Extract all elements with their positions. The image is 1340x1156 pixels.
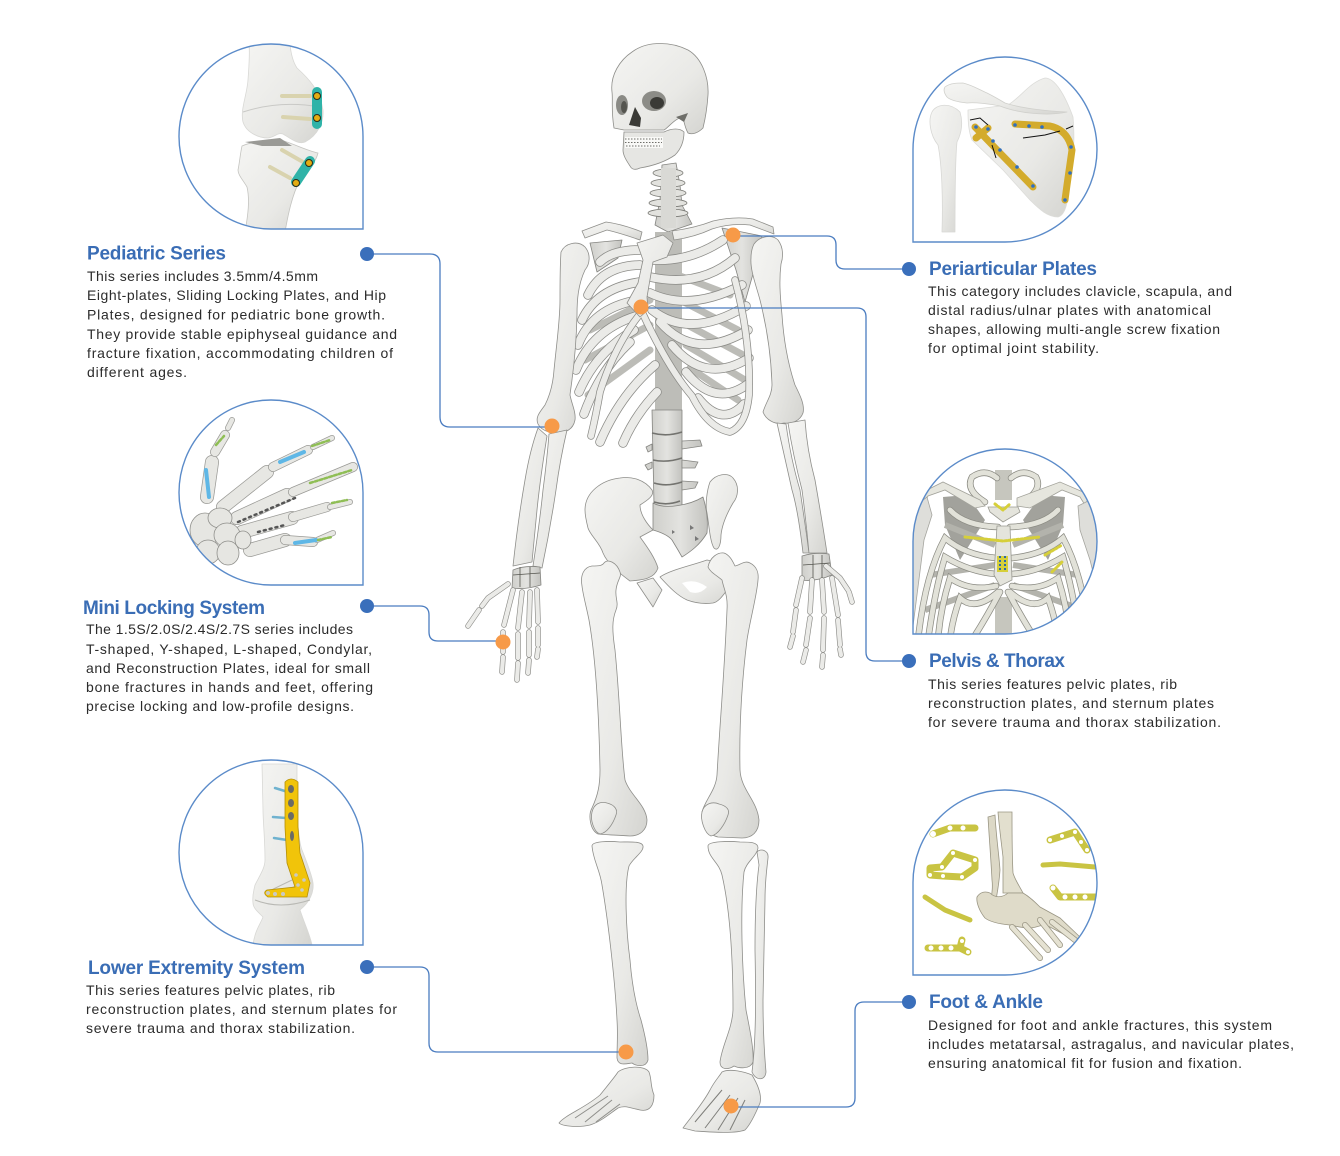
text: pelvis and thorax xyxy=(928,676,1221,730)
skeleton illustration xyxy=(468,44,852,1132)
heading: periarticular plates: Periarticular Plates xyxy=(929,259,1097,280)
panel: thorax image xyxy=(905,449,1100,640)
line: periarticular plates xyxy=(733,236,909,269)
text: pelvis and thorax: for severe trauma and thorax stabilization. xyxy=(928,714,1221,730)
line: pediatric series xyxy=(367,254,552,427)
text: mini locking system xyxy=(86,621,373,714)
text: foot and ankle xyxy=(928,1017,1294,1071)
rib cage xyxy=(576,240,749,443)
text: mini locking system: The 1.5S/2.0S/2.4S/2.7S series includes xyxy=(86,621,353,637)
text: periarticular plates xyxy=(928,283,1232,356)
text: pediatric series: fracture fixation, accommodating children of xyxy=(87,345,393,361)
left arm xyxy=(468,243,589,680)
text: mini locking system: T-shaped, Y-shaped, L-shaped, Condylar, xyxy=(86,641,372,657)
pelvis xyxy=(585,475,738,607)
text: pediatric series xyxy=(87,268,397,380)
text: pediatric series: They provide stable epiphyseal guidance and xyxy=(87,326,397,342)
panel: lower extremity ankle plate image xyxy=(179,760,363,945)
heading: foot and ankle: Foot & Ankle xyxy=(929,992,1043,1013)
feet xyxy=(559,1067,761,1132)
femurs xyxy=(581,553,759,838)
cervical spine xyxy=(648,163,692,232)
text: pelvis and thorax: This series features pelvic plates, rib xyxy=(928,676,1177,692)
line: mini locking system xyxy=(367,606,503,641)
line: pelvis and thorax xyxy=(641,308,909,661)
panel: periarticular shoulder image xyxy=(913,57,1097,242)
text: foot and ankle: ensuring anatomical fit for fusion and fixation. xyxy=(928,1055,1242,1071)
panel: mini locking hand image xyxy=(179,400,363,585)
text: periarticular plates: distal radius/ulnar plates with anatomical xyxy=(928,302,1211,318)
text: pediatric series: Plates, designed for pediatric bone growth. xyxy=(87,306,385,322)
text: foot and ankle: Designed for foot and ankle fractures, this system xyxy=(928,1017,1272,1033)
text: mini locking system: precise locking and low-profile designs. xyxy=(86,698,354,714)
lower legs xyxy=(592,841,768,1079)
line: foot and ankle xyxy=(731,1002,909,1107)
patellae xyxy=(591,802,729,836)
panel: pediatric knee image xyxy=(179,44,363,232)
heading: mini locking system: Mini Locking System xyxy=(83,598,265,619)
scapulae xyxy=(590,228,762,302)
text: pediatric series: This series includes 3.5mm/4.5mm xyxy=(87,268,318,284)
spine thoracic and lumbar xyxy=(645,232,702,512)
text: lower extremity system: reconstruction plates, and sternum plates for xyxy=(86,1001,397,1017)
clavicles xyxy=(582,218,774,240)
text: foot and ankle: includes metatarsal, astragalus, and navicular plates, xyxy=(928,1036,1294,1052)
text: periarticular plates: shapes, allowing multi-angle screw fixation xyxy=(928,321,1220,337)
heading: pediatric series: Pediatric Series xyxy=(87,244,226,264)
line: lower extremity system xyxy=(367,967,626,1052)
text: pediatric series: Eight-plates, Sliding Locking Plates, and Hip xyxy=(87,287,386,303)
panel: foot and ankle image xyxy=(913,790,1097,975)
text: mini locking system: bone fractures in hands and feet, offering xyxy=(86,679,373,695)
text: periarticular plates: for optimal joint stability. xyxy=(928,340,1099,356)
sternum xyxy=(627,235,673,317)
text: lower extremity system xyxy=(86,982,397,1036)
skull xyxy=(612,44,708,169)
connector lines xyxy=(367,236,909,1107)
text: mini locking system: and Reconstruction Plates, ideal for small xyxy=(86,660,370,676)
text: lower extremity system: This series features pelvic plates, rib xyxy=(86,982,335,998)
text: pediatric series: different ages. xyxy=(87,364,187,380)
right arm xyxy=(751,237,852,667)
text: lower extremity system: severe trauma and thorax stabilization. xyxy=(86,1020,355,1036)
heading: pelvis and thorax: Pelvis & Thorax xyxy=(929,651,1065,672)
text: pelvis and thorax: reconstruction plates, and sternum plates xyxy=(928,695,1214,711)
text: periarticular plates: This category includes clavicle, scapula, and xyxy=(928,283,1232,299)
heading: lower extremity system: Lower Extremity System xyxy=(88,958,305,979)
blue label dots xyxy=(360,247,916,1009)
orange markers on skeleton xyxy=(496,228,740,1114)
